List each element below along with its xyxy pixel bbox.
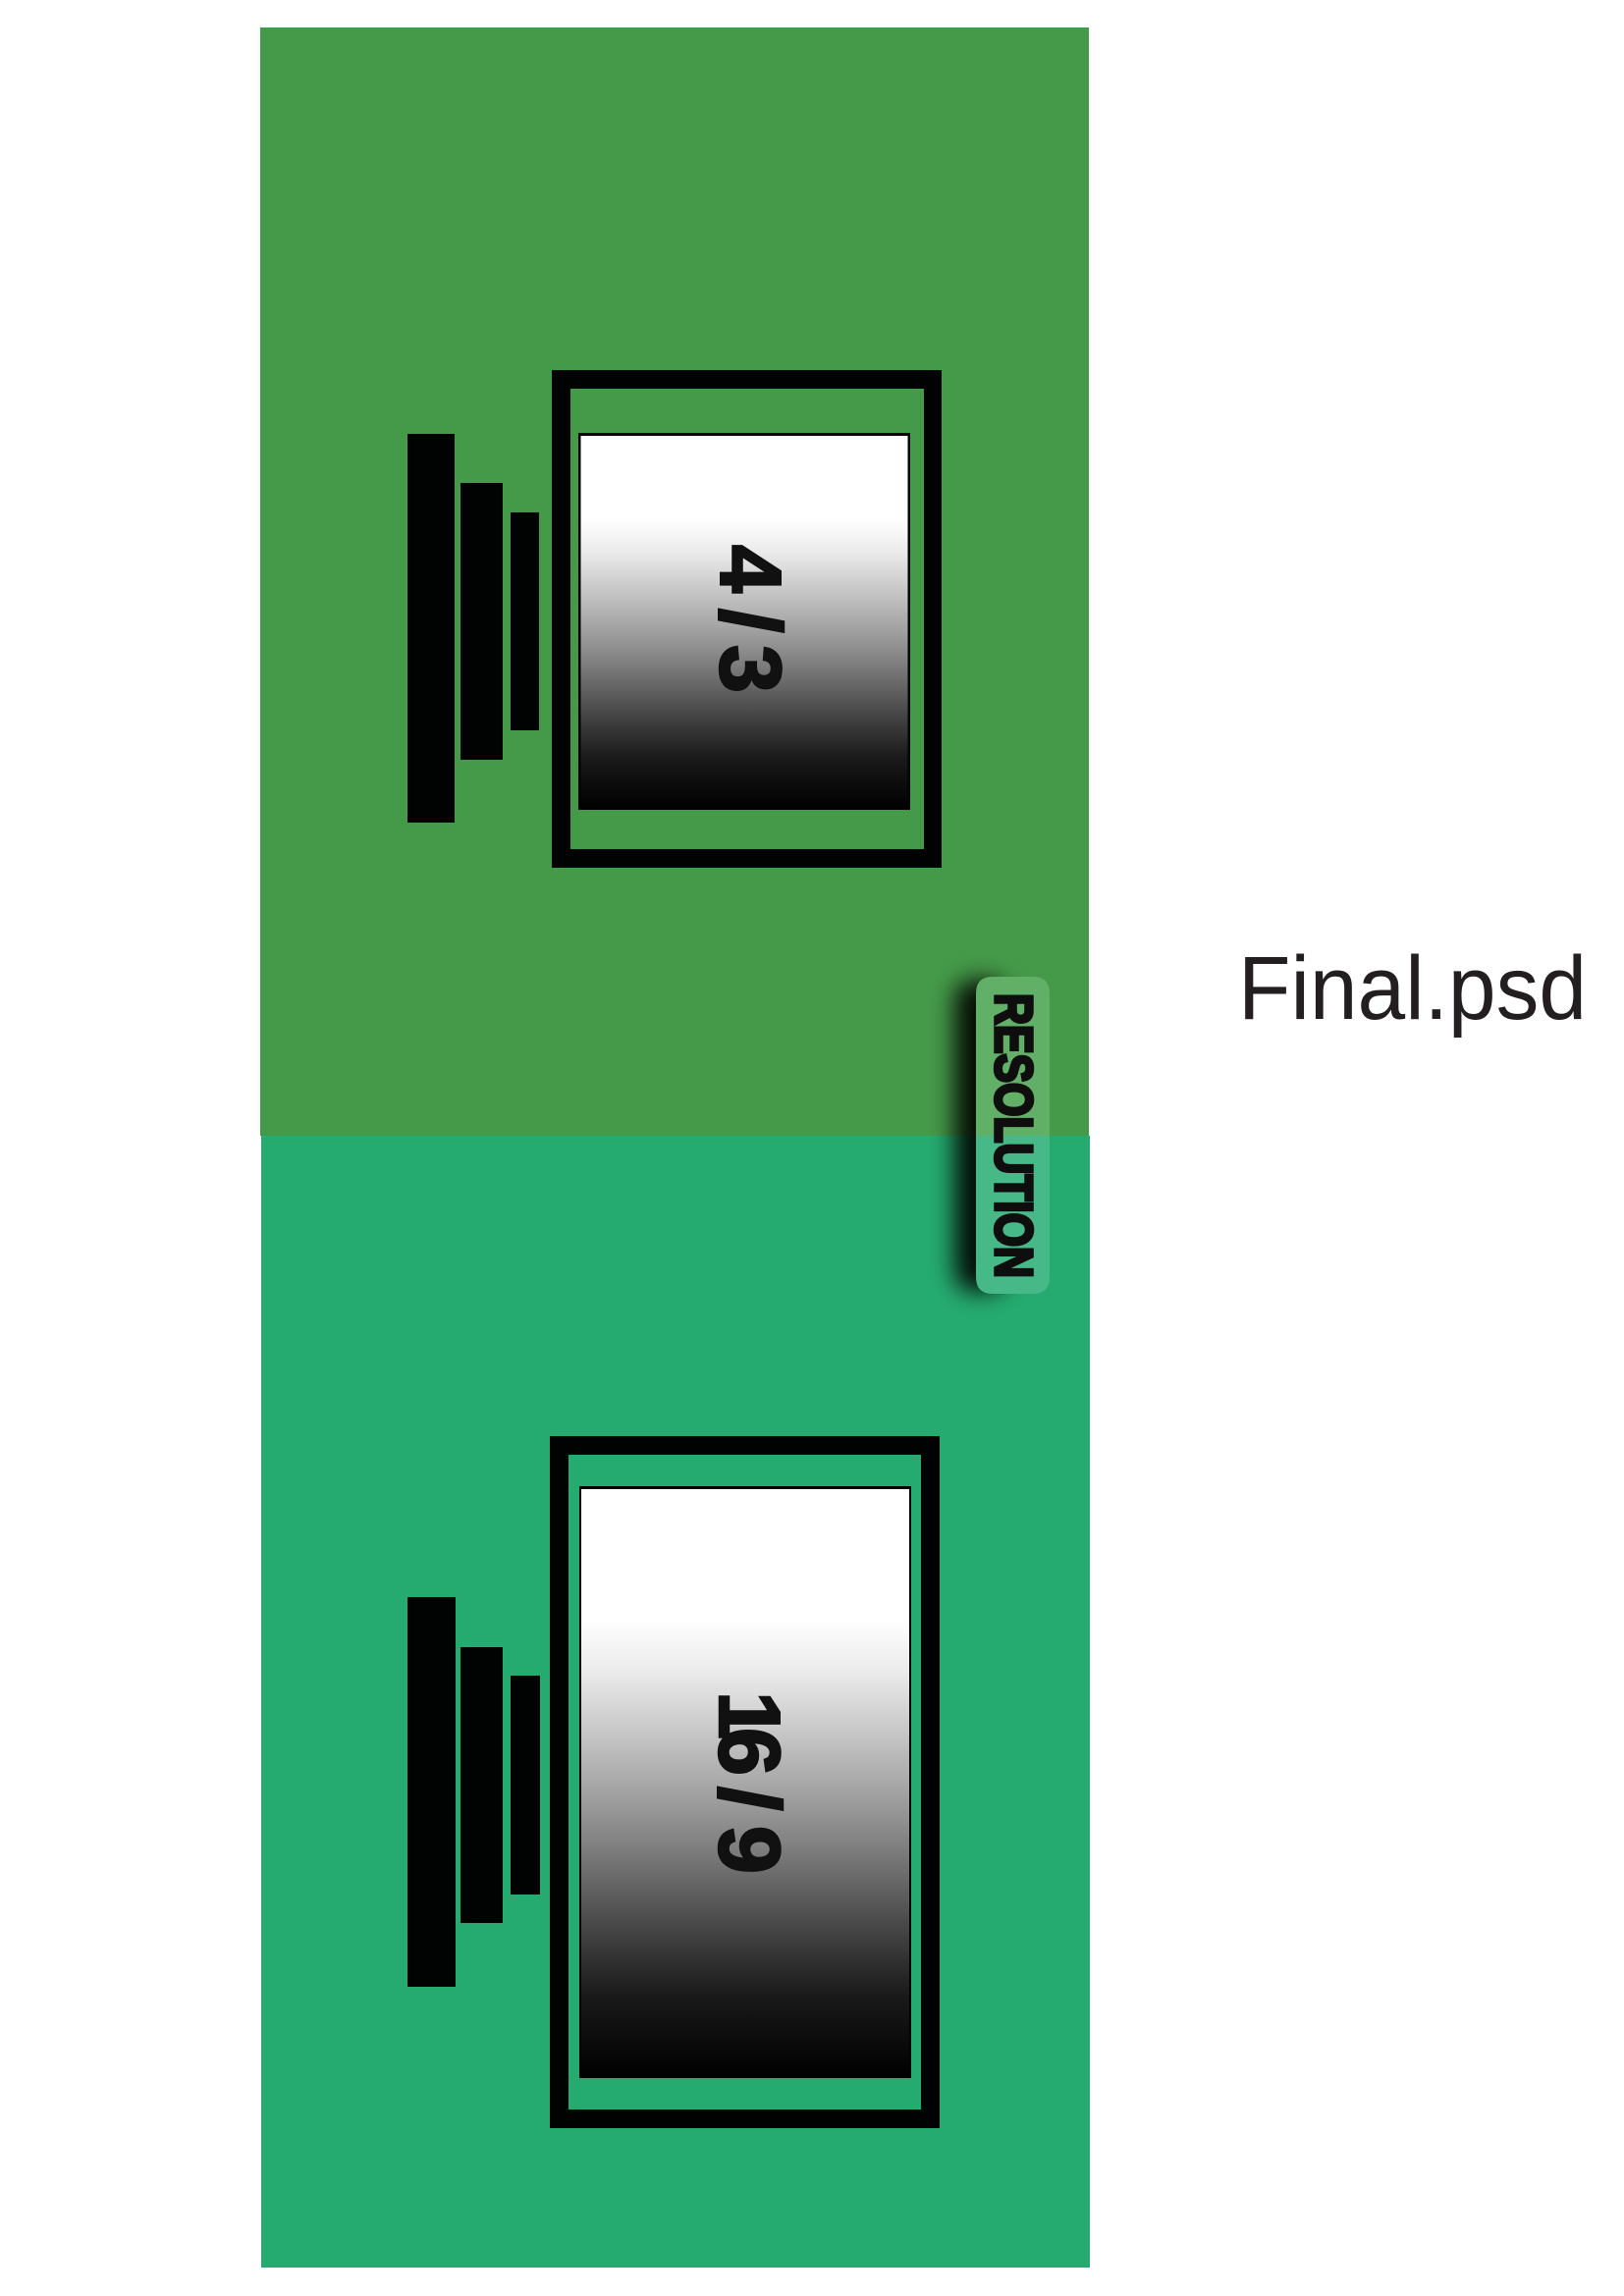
monitor frame	[550, 1436, 940, 2128]
monitor frame	[552, 370, 942, 868]
monitor stand bars	[407, 434, 539, 823]
ratio label: 4 / 3: 4 / 3	[702, 545, 799, 693]
monitor screen	[579, 1486, 911, 2078]
badge shadow	[954, 980, 1007, 1292]
icon: 16/9 monitor	[407, 1436, 940, 2128]
ratio label: 16 / 9: 16 / 9	[701, 1691, 798, 1874]
monitor screen	[578, 433, 910, 810]
icon: 4/3 monitor	[407, 370, 942, 868]
panel: 16/9 resolution background	[261, 1136, 1090, 2268]
monitor stand bars	[407, 1597, 540, 1987]
file name label: Final.psd	[1238, 938, 1587, 1039]
badge pill, lower half	[976, 1136, 1050, 1294]
panel: 4/3 resolution background	[260, 27, 1089, 1136]
badge pill, upper half	[976, 977, 1050, 1136]
badge label: RESOLUTION	[984, 993, 1043, 1278]
badge: resolution	[954, 977, 1050, 1294]
